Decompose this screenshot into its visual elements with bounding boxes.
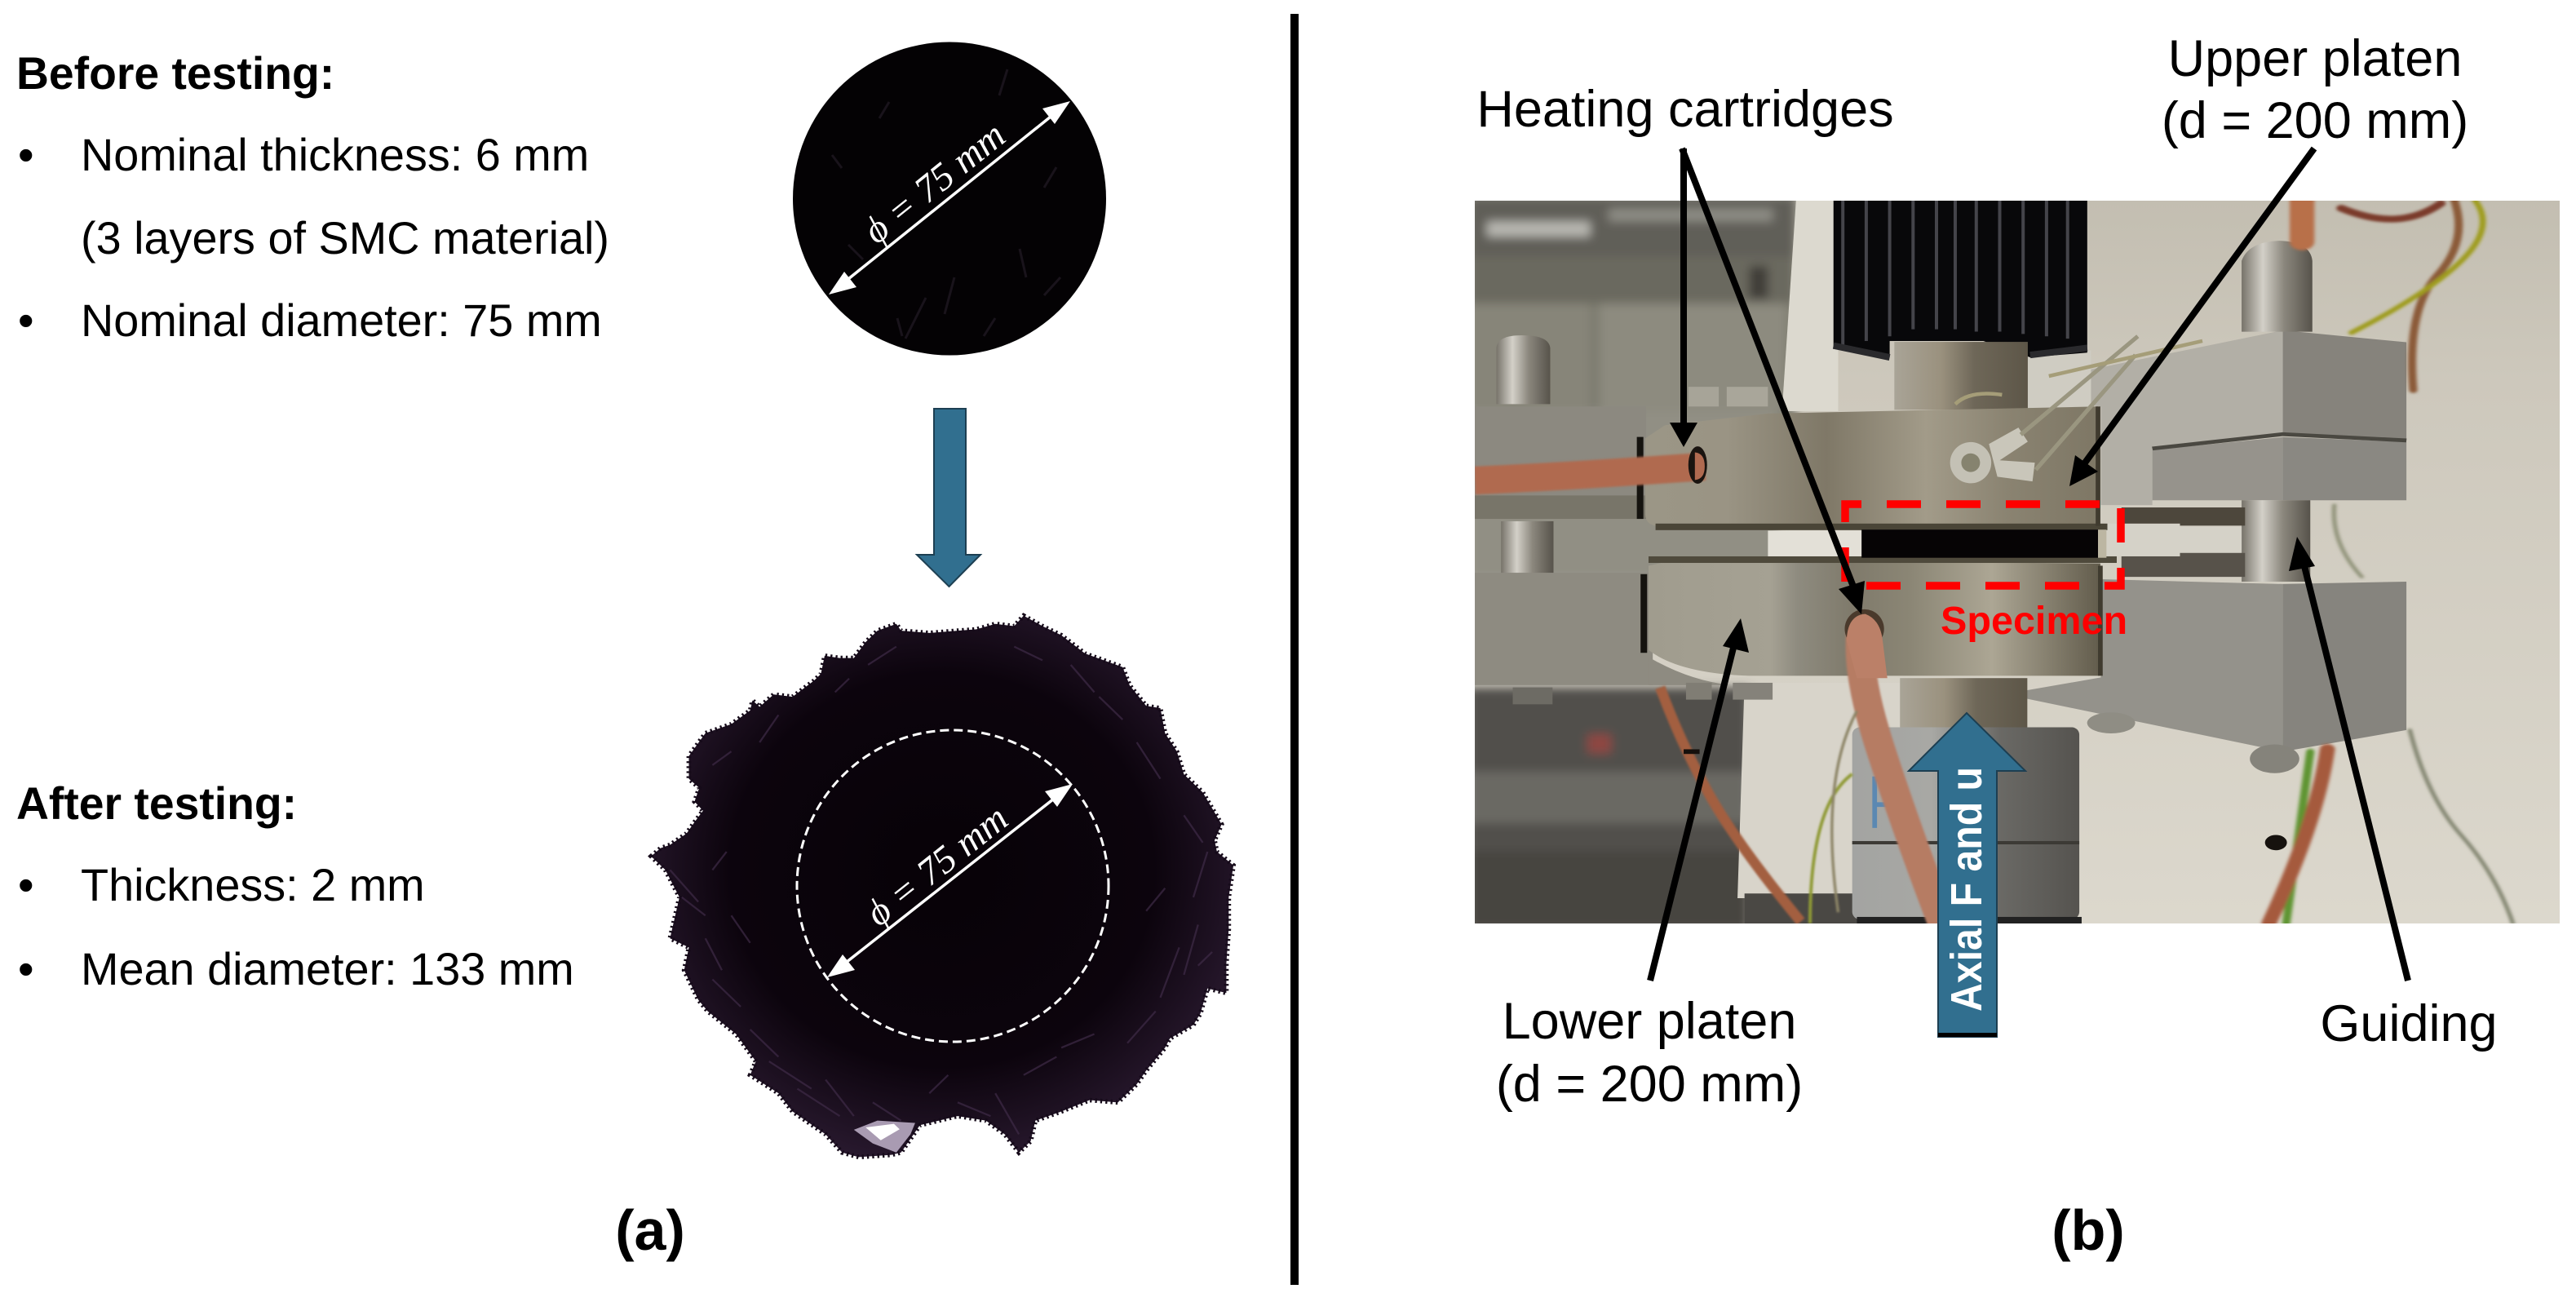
wires and cartridge cables [1475, 467, 1944, 926]
leader arrows: heating cartridges [1670, 148, 1865, 614]
specimen [1861, 529, 2098, 558]
bullet: nominal thickness: Nominal thickness: 6 mm [81, 129, 589, 180]
specimen photo: before testing disc [793, 42, 1106, 356]
heading: after testing: After testing: [16, 778, 297, 829]
labels and leader arrows [1476, 30, 2498, 1113]
label: lower platen: Lower platen [1503, 993, 1796, 1050]
arrow: axial force and displacement [1909, 713, 2025, 1037]
wall background [1475, 201, 2560, 923]
label: heating cartridges: Heating cartridges [1476, 81, 1894, 138]
caption: (a): (a) [615, 1198, 685, 1262]
label: upper platen: Upper platen [2168, 30, 2462, 87]
dimension label: ϕ = 75 mm [858, 797, 1016, 935]
bullet: nominal thickness: • [18, 129, 34, 180]
bolt with eyelet [1950, 336, 2202, 483]
bullet: thickness: • [18, 859, 34, 910]
left guide pin [1496, 335, 1550, 404]
label: upper platen: (d = 200 mm) [2162, 92, 2468, 149]
label: upper platen [2162, 30, 2468, 149]
heading: before testing: Before testing: [16, 48, 334, 99]
dashed nominal circle [797, 730, 1109, 1042]
label: specimen: Specimen [1941, 599, 2127, 643]
bullet: mean diameter: • [18, 943, 34, 994]
right block lower [2027, 579, 2282, 747]
shaft upper [1894, 342, 2028, 410]
label: lower platen: (d = 200 mm) [1496, 1056, 1803, 1113]
panel: (b) test setup photograph [1468, 30, 2560, 1262]
bullet: mean diameter: Mean diameter: 133 mm [81, 943, 574, 994]
leader arrow: upper platen [2069, 148, 2314, 486]
bright fibre patch [854, 1121, 915, 1153]
lower shaft and load cell [1900, 678, 2028, 728]
dimension label: ϕ = 75 mm [856, 114, 1013, 252]
leader arrow: guiding [2289, 537, 2408, 981]
bullet: thickness: Thickness: 2 mm [81, 859, 425, 910]
leader arrow: lower platen [1650, 618, 1749, 981]
label: guiding: Guiding [2320, 995, 2498, 1052]
photo: heated compression platens [1468, 196, 2560, 931]
label: lower platen [1496, 993, 1803, 1113]
left bars [1475, 406, 1596, 495]
heat sink [1834, 201, 2087, 357]
right block upper [2091, 331, 2282, 505]
right wires [2269, 201, 2513, 923]
note: three layers: (3 layers of SMC material) [81, 212, 609, 264]
right guide pin [2242, 241, 2313, 332]
lower platen [1649, 560, 2100, 675]
white wall behind rig [1782, 201, 1838, 411]
specimen photo: after testing blob [651, 616, 1233, 1157]
gap bars [2122, 507, 2245, 525]
divider between panels a and b [1290, 14, 1299, 1285]
text block: after testing [16, 778, 574, 994]
bullet: nominal diameter: • [18, 294, 34, 346]
panel: (a) specimen before and after testing [16, 42, 1233, 1262]
text block: before testing [16, 48, 609, 346]
arrow: axial force and displacement: Axial F and u [1942, 767, 1991, 1012]
dimension arrow [827, 784, 1073, 977]
upper platen [1645, 406, 2098, 526]
caption: (b): (b) [2052, 1198, 2125, 1262]
specimen highlight: red dashed box [1845, 504, 2121, 586]
gap bright [1768, 530, 1861, 556]
arrow: before to after [917, 409, 980, 587]
bullet: nominal diameter: Nominal diameter: 75 mm [81, 294, 602, 346]
blurred room at left [1468, 196, 1796, 931]
dimension arrow [829, 101, 1070, 294]
